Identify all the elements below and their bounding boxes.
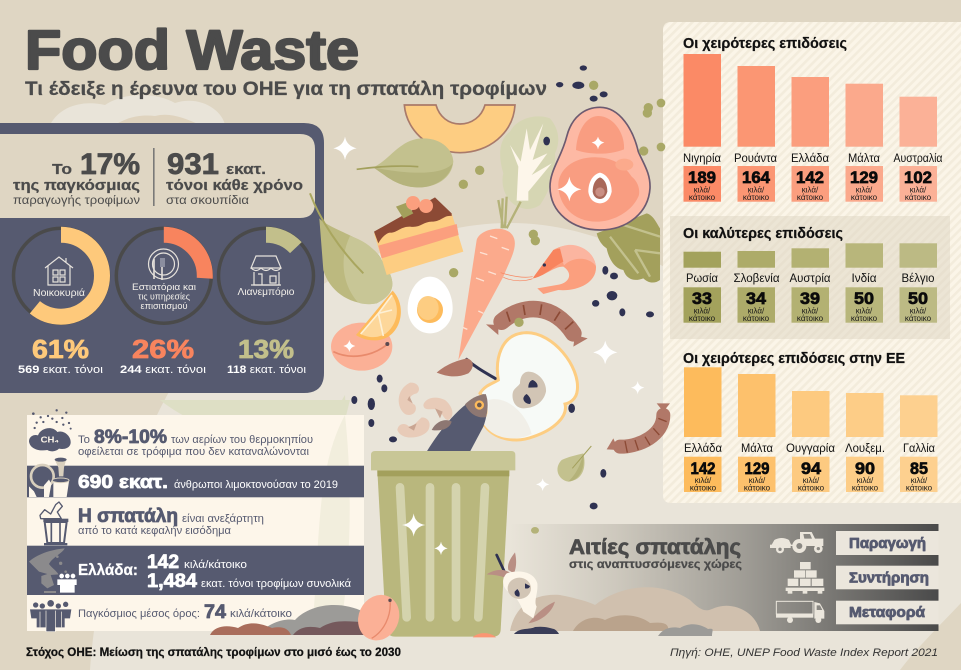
chart: worst performers: Αυστραλία <box>894 153 943 165</box>
chart: worst performers: κάτοικο <box>743 193 770 202</box>
chart: best performers: 50 <box>854 289 874 308</box>
chart: best performers: κάτοικο <box>797 314 824 323</box>
chart: best performers: κιλά/ <box>910 306 927 316</box>
chart: worst performers in the EU: κιλά/ <box>803 476 820 485</box>
chart: best performers: Ρωσία <box>686 273 718 285</box>
chart: worst performers: κάτοικο <box>689 193 716 202</box>
chart: worst performers in the EU: Ουγγαρία <box>786 443 835 455</box>
chart: best performers: κάτοικο <box>743 314 770 323</box>
carrot leaf <box>437 358 473 376</box>
fact: waste and income: είναι ανεξάρτητη <box>182 513 264 525</box>
seeds lower <box>351 375 606 509</box>
chart: worst performers: 189 <box>688 168 716 187</box>
spinach leaf <box>357 138 453 187</box>
fact: world average: Παγκόσμιος μέσος όρος: <box>78 608 200 620</box>
fact: Greece <box>29 548 352 593</box>
icon: stacked boxes <box>786 562 824 594</box>
chart: best performers <box>683 226 937 323</box>
headline stats box: τόνοι κάθε χρόνο <box>166 177 303 194</box>
fact: Greece: 142 <box>147 552 179 573</box>
headline stats box: στα σκουπίδια <box>166 193 249 207</box>
mounds of waste <box>210 605 364 635</box>
donut: restaurants: επισιτισμού <box>140 301 188 312</box>
cause: production: Παραγωγή <box>849 536 926 552</box>
donut: retail: 118 εκατ. τόνοι <box>227 364 307 376</box>
sausage lower right <box>607 403 670 453</box>
chart: worst performers in the EU: Μάλτα <box>741 443 773 455</box>
sausage <box>486 304 588 347</box>
chart: worst performers in the EU: Ελλάδα <box>684 443 722 455</box>
shrimp <box>501 245 596 294</box>
chart: worst performers <box>683 36 943 202</box>
chart: worst performers in the EU: κιλά/ <box>857 476 874 485</box>
headline stats box: εκατ. <box>226 161 266 178</box>
apple half <box>467 333 578 440</box>
fact: hunger: 690 εκατ. <box>78 471 168 492</box>
carrot <box>458 197 521 360</box>
chart: best performers: κιλά/ <box>856 306 873 316</box>
headline stats box <box>0 134 315 218</box>
donut: households <box>14 228 108 376</box>
chart: worst performers: Ρουάντα <box>734 153 777 165</box>
chart: worst performers: Οι χειρότερες επιδόσεις <box>683 36 847 52</box>
peach <box>331 323 392 371</box>
panel: key facts <box>27 409 364 635</box>
chart: best performers: Βέλγιο <box>902 273 934 285</box>
chart: worst performers in the EU: κιλά/ <box>749 476 766 485</box>
fact: greenhouse gases: των αερίων του θερμοκηπίου <box>171 434 313 446</box>
ham steak <box>550 107 650 230</box>
chart: best performers: 33 <box>692 289 712 308</box>
cause: transport: Μεταφορά <box>849 605 925 621</box>
illustration: food falling into the bin <box>351 333 670 647</box>
icon: hungry people with plates <box>29 458 69 497</box>
chart: worst performers in the EU: κιλά/ <box>911 476 928 485</box>
donut: restaurants: 244 εκατ. τόνοι <box>120 364 207 376</box>
fact: greenhouse gases: οφείλεται σε τρόφιμα που δεν καταναλώνονται <box>78 446 310 458</box>
chart: worst performers: κιλά/ <box>694 186 711 194</box>
chart: worst performers in the EU: 129 <box>744 459 770 478</box>
fact: waste and income: Η σπατάλη <box>78 506 178 527</box>
chart: worst performers: 164 <box>742 168 771 187</box>
chart: worst performers in the EU <box>683 351 938 492</box>
cashews <box>397 383 452 438</box>
panel: country rankings <box>663 22 961 503</box>
large green leaf <box>310 193 392 304</box>
fact: world average: κιλά/κάτοικο <box>230 608 292 620</box>
decorative mounds <box>510 587 760 636</box>
fish <box>427 394 488 452</box>
headline stats box: παραγωγής τροφίμων <box>13 193 140 207</box>
donut: households: 61% <box>32 334 89 364</box>
chart: worst performers: 129 <box>850 168 878 187</box>
fact: greenhouse gases: 8%-10% <box>94 427 167 448</box>
chart: worst performers: κάτοικο <box>905 193 932 202</box>
headline stats box: Το <box>52 161 72 178</box>
fact: Greece: 1,484 <box>147 571 197 592</box>
fact: world average: 74 <box>204 602 226 623</box>
small leaf <box>557 446 591 482</box>
chart: worst performers in the EU: κάτοικο <box>906 484 933 492</box>
icon: plate and cutlery <box>148 249 178 280</box>
apple core <box>487 552 555 623</box>
chart: best performers: κάτοικο <box>689 314 716 323</box>
chart: worst performers in the EU: κάτοικο <box>690 484 717 492</box>
icon: tractor <box>770 532 823 553</box>
peas <box>449 81 665 369</box>
chart: best performers: κιλά/ <box>694 306 711 316</box>
fact: hunger <box>29 458 338 497</box>
boiled egg <box>408 277 453 333</box>
chart: worst performers: Ελλάδα <box>791 153 829 165</box>
cause: transport <box>776 601 938 624</box>
fact: greenhouse gases <box>29 409 313 458</box>
chart: worst performers in the EU: Γαλλία <box>903 443 935 455</box>
icon: methane cloud <box>29 409 72 451</box>
donut: restaurants: τις υπηρεσίες <box>138 292 190 302</box>
icon: house <box>45 257 73 285</box>
chart: worst performers: Μάλτα <box>848 153 880 165</box>
chart: worst performers in the EU: 90 <box>855 459 875 478</box>
icon: crowd <box>30 600 71 632</box>
chart: best performers: Αυστρία <box>790 273 831 285</box>
chart: worst performers: κιλά/ <box>748 186 765 194</box>
donut: restaurants: Εστιατόρια και <box>132 282 196 293</box>
donut: restaurants: 26% <box>132 334 194 364</box>
waste bin <box>371 451 515 637</box>
chart: best performers: 50 <box>908 289 928 308</box>
chard leaf <box>500 116 558 209</box>
fact: Greece: Ελλάδα: <box>78 562 138 579</box>
donut: restaurants <box>116 228 211 376</box>
fact: world average <box>30 600 292 632</box>
chart: worst performers: κιλά/ <box>910 186 927 194</box>
fact: hunger: άνθρωποι λιμοκτονούσαν το 2019 <box>174 479 338 491</box>
peach at bin base <box>351 588 407 647</box>
chart: best performers: κάτοικο <box>905 314 932 323</box>
sparkles <box>333 137 617 364</box>
chart: worst performers in the EU: Οι χειρότερες επιδόσεις στην ΕΕ <box>683 351 905 367</box>
chart: worst performers in the EU: κάτοικο <box>798 484 825 492</box>
source: Πηγή: ΟΗΕ, UNEP Food Waste Index Report 2021 <box>670 647 938 659</box>
donut: households: 569 εκατ. τόνοι <box>18 364 104 376</box>
chart: worst performers in the EU: Λουξεμ. <box>845 443 885 455</box>
footer goal: Στόχος ΟΗΕ: Μείωση της σπατάλης τροφίμων στο μισό έως το 2030 <box>26 647 401 659</box>
headline stats box: της παγκόσμιας <box>13 177 140 194</box>
chart: worst performers: Νιγηρία <box>683 153 721 165</box>
fact: waste and income: από το κατά κεφαλήν εισόδημα <box>78 525 232 537</box>
icon: people <box>57 574 77 593</box>
chart: worst performers: κιλά/ <box>802 186 819 194</box>
panel: global figures and breakdown <box>0 123 324 393</box>
panel: causes of waste: Αιτίες σπατάλης <box>569 536 741 559</box>
chart: best performers: Ινδία <box>852 273 877 285</box>
chart: best performers: Σλοβενία <box>734 273 780 285</box>
panel: causes of waste: στις αναπτυσσόμενες χώρες <box>569 557 742 571</box>
cause: storage: Συντήρηση <box>849 571 929 587</box>
illustration: falling food, upper part <box>310 65 665 371</box>
headline stats box: 17% <box>80 148 140 181</box>
chart: worst performers in the EU: 142 <box>690 459 716 478</box>
icon: methane cloud: CH₄ <box>41 434 59 444</box>
headline stats box: 931 <box>167 148 219 181</box>
chart: worst performers in the EU: 94 <box>801 459 822 478</box>
fact: waste and income <box>40 502 264 545</box>
chart: best performers: κιλά/ <box>802 306 819 316</box>
icon: truck <box>776 601 824 623</box>
fact: greenhouse gases: Το <box>78 434 90 446</box>
sparkles lower <box>402 342 644 555</box>
icon: trash bin with food <box>40 502 68 545</box>
chart: worst performers: 102 <box>904 168 932 187</box>
chart: worst performers in the EU: 85 <box>910 459 928 478</box>
cause: storage <box>786 562 938 594</box>
chart: best performers: 34 <box>746 289 767 308</box>
pea near causes panel <box>531 527 539 534</box>
donut: households: Νοικοκυριά <box>33 287 85 299</box>
chart: worst performers in the EU: κάτοικο <box>852 484 879 492</box>
chart: worst performers in the EU: κιλά/ <box>695 476 712 485</box>
donut: retail: Λιανεμπόριο <box>238 286 295 298</box>
subtitle: Τι έδειξε η έρευνα του ΟΗΕ για τη σπατάλη τροφίμων <box>25 79 547 100</box>
chart: best performers: 39 <box>800 289 820 308</box>
panel: causes of waste <box>510 524 938 636</box>
chart: best performers: Οι καλύτερες επιδόσεις <box>683 226 843 242</box>
title: Food Waste <box>25 18 359 81</box>
chart: worst performers: 142 <box>796 168 824 187</box>
seeds <box>543 65 654 317</box>
icon: map of Greece <box>29 548 67 593</box>
fact: Greece: εκατ. τόνοι τροφίμων συνολικά <box>201 578 352 590</box>
chart: worst performers: κάτοικο <box>851 193 878 202</box>
icon: shop <box>251 256 281 285</box>
chart: worst performers: κάτοικο <box>797 193 824 202</box>
chart: worst performers in the EU: κάτοικο <box>744 484 771 492</box>
donut: retail <box>218 228 314 376</box>
donut: retail: 13% <box>238 334 294 364</box>
cake slice <box>374 196 463 275</box>
fact: Greece: κιλά/κάτοικο <box>184 559 247 571</box>
cause: production <box>770 531 938 555</box>
dark green leaf <box>597 213 660 283</box>
orange slice <box>356 291 401 340</box>
chart: best performers: κάτοικο <box>851 314 878 323</box>
melon slice <box>404 105 515 153</box>
chart: worst performers: κιλά/ <box>856 186 873 194</box>
chart: best performers: κιλά/ <box>748 306 765 316</box>
